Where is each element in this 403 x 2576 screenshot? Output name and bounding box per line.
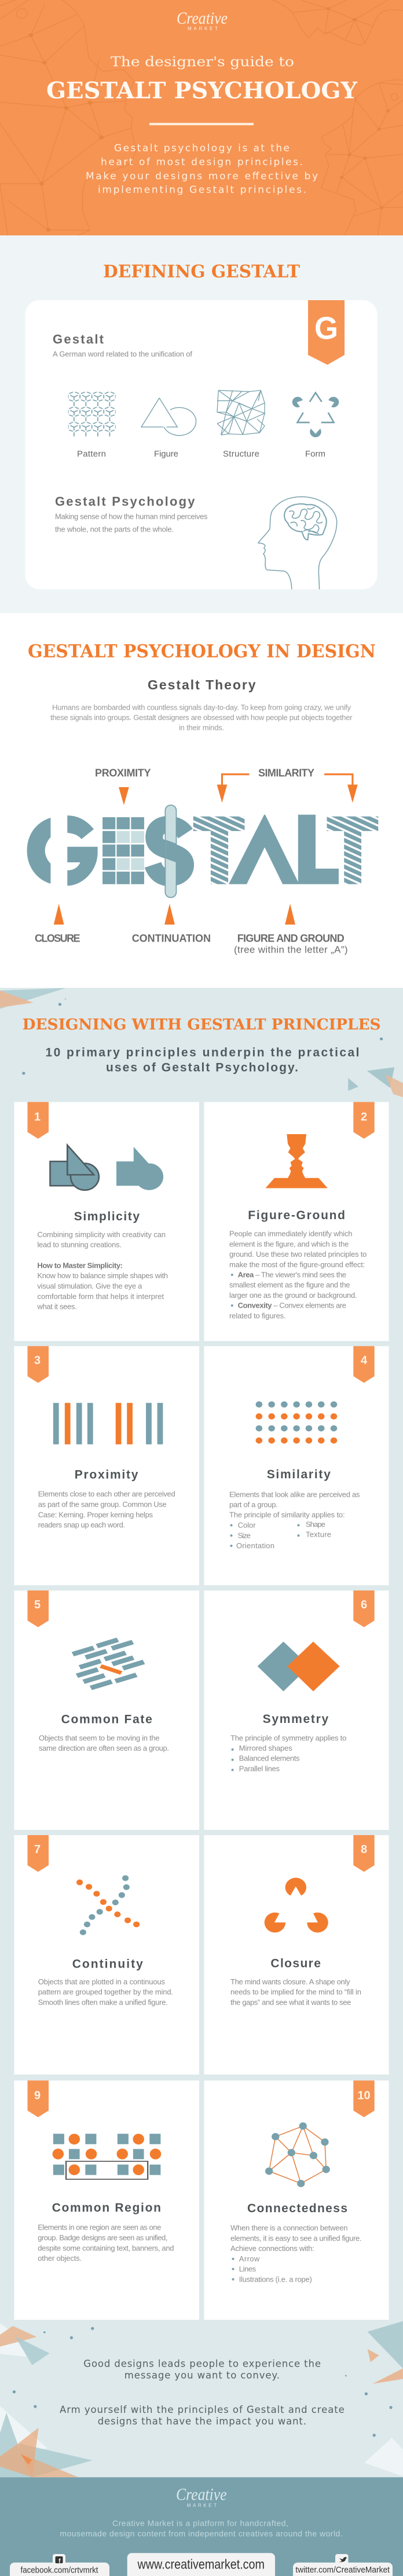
icon: facebook: f: [58, 2557, 61, 2564]
main title: GESTALT PSYCHOLOGY: [46, 77, 358, 104]
bookmark: 10: 10: [357, 2089, 371, 2102]
title: Connectedness: [247, 2202, 347, 2215]
bookmark: G: G: [314, 310, 338, 346]
facebook tag: facebook.com/crtvmrkt: [21, 2565, 98, 2575]
title: Proximity: [75, 1468, 138, 1482]
subheading: [45, 1046, 359, 1074]
body: Combining simplicity with creativity can: [37, 1230, 166, 1239]
title kicker: The designer's guide to: [111, 54, 294, 69]
body: The mind wants closure. A shape only: [230, 1977, 350, 1986]
logo: Creative Market: MARKET: [188, 26, 218, 31]
panel: defining gestalt: [0, 235, 403, 613]
body: Smooth lines often make a unified figure.: [38, 1998, 168, 2006]
body: [229, 1490, 360, 1550]
twitter tag: twitter.com/CreativeMarket: [295, 2565, 390, 2575]
website tag: [127, 2553, 275, 2576]
subheading: gestalt theory: Gestalt Theory: [148, 677, 256, 692]
bookmark: 1: [28, 1102, 49, 1139]
body: larger one as the ground or background.: [229, 1291, 357, 1300]
icon: pattern: Pattern: [77, 449, 106, 459]
body: what it sees.: [36, 1302, 77, 1311]
body: Case: Kerning. Proper kerning helps: [38, 1510, 153, 1519]
closing statement: message you want to convey.: [124, 2370, 280, 2381]
subheading: 10 primary principles underpin the practical: [45, 1046, 359, 1059]
body: smallest element as the figure and the: [229, 1280, 350, 1289]
icon: crossing dots: [76, 1875, 140, 1935]
card 2: figure-ground: [204, 1102, 389, 1341]
body: Texture: [306, 1530, 331, 1539]
body: [230, 1733, 346, 1773]
title: Figure-Ground: [248, 1209, 345, 1222]
icon: vertical bars: [53, 1403, 163, 1444]
body: Orientation: [236, 1541, 274, 1550]
label: continuation: CONTINUATION: [132, 932, 211, 944]
text: gestalt definition: [53, 332, 192, 359]
title: Common Fate: [61, 1713, 152, 1726]
logo: Creative Market: Creative: [176, 2485, 227, 2504]
gestalt lettering illustration: [27, 805, 378, 898]
body: The principle of similarity applies to:: [229, 1511, 345, 1519]
body: related to figures.: [229, 1311, 286, 1320]
bookmark: 5: 5: [34, 1599, 41, 1611]
panel: gestalt psychology in design: [0, 613, 403, 988]
bookmark: 7: 7: [34, 1843, 41, 1856]
closing statement: Arm yourself with the principles of Gestalt and create: [60, 2404, 345, 2415]
body: Balanced elements: [239, 1754, 300, 1763]
body: Area – The viewer's mind sees the: [238, 1270, 346, 1279]
theory paragraph: Humans are bombarded with countless signals day-to-day. To keep from going crazy, we unify: [52, 703, 351, 711]
icon: form: [292, 393, 339, 459]
decorative triangles: bottom: [0, 2321, 403, 2477]
facebook tag: [10, 2554, 109, 2576]
closing statement: Good designs leads people to experience the: [83, 2358, 321, 2369]
bookmark: 1: 1: [34, 1110, 41, 1123]
title: Continuity: [72, 1958, 143, 1971]
text: gestalt psychology definition: Making sense of how the human mind perceives: [55, 512, 208, 521]
body: How to Master Simplicity:: [37, 1261, 123, 1269]
theory paragraph: in their minds.: [179, 723, 224, 732]
logo: Creative Market: MARKET: [187, 2503, 217, 2508]
text: gestalt psychology definition: [55, 494, 208, 533]
label: similarity: SIMILARITY: [258, 767, 314, 778]
heading: defining gestalt: DEFINING GESTALT: [103, 261, 301, 282]
text: gestalt definition: A German word related to the unification of: [53, 349, 192, 359]
body: despite some containing text, banners, and: [38, 2243, 174, 2252]
body: Convexity – Convex elements are: [238, 1301, 346, 1310]
bookmark: 6: 6: [361, 1599, 367, 1611]
bookmark: 2: [353, 1102, 375, 1139]
card 4: similarity: [204, 1346, 389, 1585]
bookmark: 4: 4: [361, 1355, 368, 1367]
body: Size: [238, 1531, 251, 1540]
body: The principle of symmetry applies to: [230, 1733, 346, 1742]
title: Common Region: [52, 2201, 161, 2215]
about text: mousemade design content from independent creatives around the world.: [60, 2529, 343, 2538]
body: lead to stunning creations.: [37, 1241, 122, 1249]
body: [36, 1230, 168, 1311]
body: Lines: [239, 2265, 256, 2274]
icon: structure: Structure: [223, 449, 259, 459]
intro text: [86, 143, 318, 195]
body: ground. Use these two related principles to: [229, 1250, 367, 1259]
definition card: [25, 300, 378, 589]
body: Know how to balance simple shapes with: [37, 1271, 168, 1280]
card 10: connectedness: [204, 2080, 389, 2320]
label: figure and ground: [234, 932, 347, 955]
theory paragraph: [50, 703, 353, 732]
title: Symmetry: [263, 1713, 329, 1726]
title: Closure: [270, 1957, 321, 1970]
body: [229, 1230, 367, 1320]
bookmark: 2: 2: [361, 1110, 367, 1123]
icon: facebook: [56, 2556, 63, 2564]
body: part of a group.: [229, 1500, 278, 1509]
heading: DESIGNING WITH GESTALT PRINCIPLES: [23, 1016, 381, 1034]
body: group. Badge designs are seen as unified,: [38, 2233, 167, 2242]
icon: pattern: [68, 392, 116, 459]
body: readers snap up each word.: [38, 1520, 125, 1529]
icon: vase and faces: [265, 1134, 328, 1188]
card 9: common region: [14, 2080, 199, 2320]
arrows: [54, 774, 358, 925]
theory paragraph: these signals into groups. Gestalt designers are obsessed with how people put objects together: [50, 713, 353, 722]
icon: form: Form: [305, 449, 325, 459]
body: visual stimulation. Give the eye a: [37, 1282, 142, 1290]
closing statement: [60, 2358, 345, 2427]
icon: slanted bars: [72, 1637, 145, 1690]
bookmark: 4: [353, 1346, 375, 1383]
body: needs to be implied for the mind to “fill in: [230, 1988, 361, 1996]
heading: GESTALT PSYCHOLOGY IN DESIGN: [28, 641, 376, 662]
body: comfortable form that helps it interpret: [37, 1292, 164, 1301]
icon: figure: Figure: [154, 449, 178, 459]
text: gestalt psychology definition: the whole, not the parts of the whole.: [55, 525, 174, 533]
bookmark: 5: [28, 1590, 49, 1627]
decorative triangles: top: [0, 988, 403, 1097]
icon: connected nodes: [265, 2123, 330, 2187]
card 5: common fate: [14, 1590, 199, 1830]
bookmark: 8: [353, 1835, 375, 1872]
label: figure and ground: (tree within the letter „A”): [234, 944, 347, 955]
background network of head outlines: [0, 0, 403, 235]
icon: structure: [217, 390, 265, 459]
body: as part of the same group. Common Use: [38, 1500, 167, 1508]
about text: [60, 2519, 343, 2538]
bookmark: 9: [28, 2080, 49, 2117]
body: Objects that seem to be moving in the: [39, 1733, 160, 1742]
bookmark: 10: [353, 2080, 375, 2117]
card 7: continuity: [14, 1835, 199, 2075]
icon: figure: [141, 398, 196, 459]
body: Ilustrations (i.e. a rope): [239, 2275, 312, 2283]
icon: shapes in region: [53, 2134, 161, 2179]
icon: implied triangle: [265, 1878, 328, 1932]
icon: overlapping shapes: [50, 1145, 163, 1190]
label: figure and ground: FIGURE AND GROUND: [237, 932, 345, 944]
about text: Creative Market is a platform for handcrafted,: [112, 2519, 288, 2528]
intro text: heart of most design principles.: [101, 157, 303, 168]
body: [38, 1977, 173, 2006]
body: Shape: [306, 1520, 325, 1529]
body: other objects.: [38, 2254, 82, 2263]
body: same direction are often seen as a group.: [39, 1744, 169, 1752]
bookmark: 3: 3: [34, 1355, 41, 1367]
body: Objects that are plotted in a continuous: [38, 1977, 166, 1986]
body: Color: [238, 1521, 256, 1530]
text: gestalt definition: Gestalt: [53, 332, 104, 346]
text: gestalt psychology definition: Gestalt Psychology: [55, 494, 195, 509]
logo: Creative Market: Creative: [177, 9, 228, 28]
title: Simplicity: [74, 1210, 140, 1223]
card 1: simplicity: [14, 1102, 199, 1341]
body: pattern are grouped together by the mind.: [38, 1988, 173, 1996]
subheading: uses of Gestalt Psychology.: [106, 1061, 298, 1074]
label: closure: CLOSURE: [35, 932, 80, 944]
body: Elements in one region are seen as one: [38, 2223, 161, 2232]
body: Arrow: [239, 2254, 260, 2263]
icon: head with brain: [258, 497, 337, 589]
body: [38, 1490, 175, 1529]
bookmark: G: [308, 300, 345, 365]
panel: designing with gestalt principles: [0, 988, 403, 2478]
body: make the most of the figure-ground effect:: [229, 1260, 365, 1269]
icon: twitter bird: [339, 2557, 347, 2562]
panel: footer: [0, 2477, 403, 2576]
body: the gaps” and see what it wants to see: [230, 1998, 351, 2006]
panel: hero: [0, 0, 403, 235]
bookmark: 6: [353, 1590, 375, 1627]
intro text: Gestalt psychology is at the: [114, 143, 290, 154]
body: [38, 2223, 174, 2263]
twitter tag: [293, 2554, 393, 2576]
intro text: Make your designs more effective by: [86, 171, 318, 182]
body: element is the figure, and which is the: [229, 1239, 349, 1248]
body: [39, 1733, 169, 1752]
body: Mirrored shapes: [239, 1744, 292, 1752]
icon: diamonds: [258, 1641, 340, 1691]
closing statement: designs that have the impact you want.: [98, 2416, 306, 2427]
intro text: implementing Gestalt principles.: [98, 184, 306, 195]
body: Parallel lines: [239, 1764, 280, 1773]
body: [230, 2224, 361, 2283]
title: Similarity: [267, 1468, 331, 1481]
website tag: www.creativemarket.com: [137, 2557, 265, 2572]
bookmark: 9: 9: [34, 2089, 41, 2102]
icon: dot rows: [256, 1401, 337, 1444]
bookmark: 7: [28, 1835, 49, 1872]
body: Elements close to each other are perceived: [38, 1490, 175, 1499]
body: Achieve connections with:: [230, 2244, 314, 2253]
body: [230, 1977, 361, 2006]
card 3: proximity: [14, 1346, 199, 1585]
card 8: closure: [204, 1835, 389, 2075]
body: When there is a connection between: [230, 2224, 347, 2232]
divider: [149, 123, 254, 125]
body: elements, it is easy to see a unified figure.: [230, 2234, 361, 2242]
body: Elements that look alike are perceived as: [229, 1490, 360, 1499]
bookmark: 8: 8: [361, 1843, 367, 1856]
card 6: symmetry: [204, 1590, 389, 1830]
label: proximity: PROXIMITY: [95, 767, 151, 778]
bookmark: 3: [28, 1346, 49, 1383]
body: People can immediately identify which: [229, 1230, 352, 1238]
